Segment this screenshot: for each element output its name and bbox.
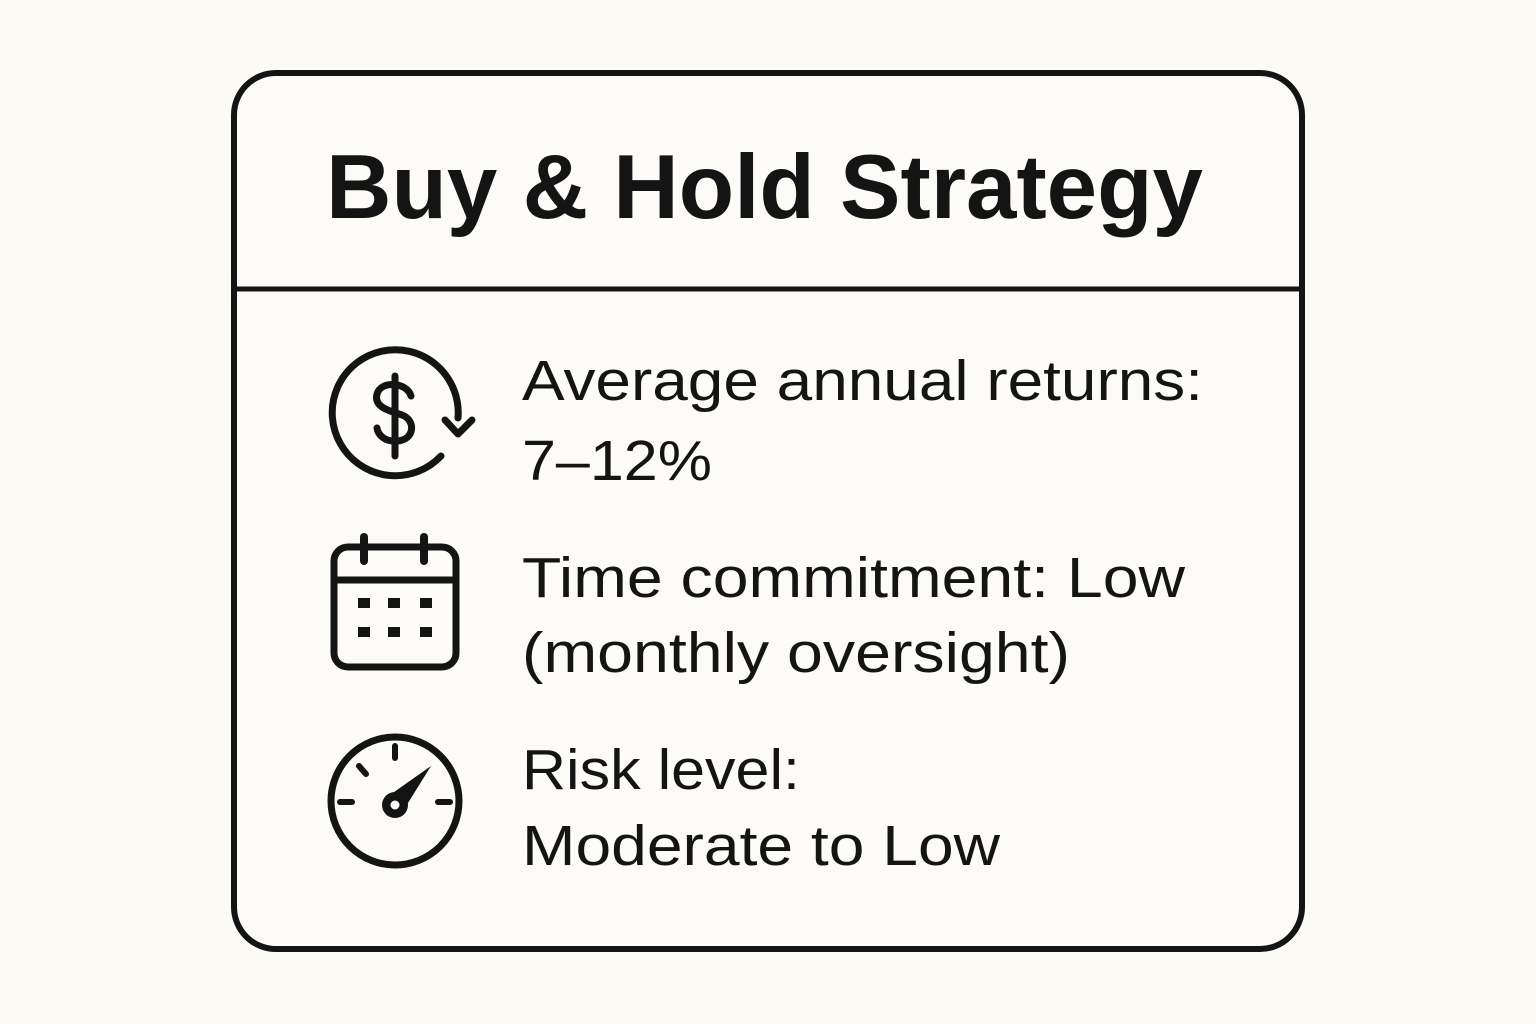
icon: calendar	[334, 537, 456, 667]
icon: dollar cycle	[332, 350, 472, 476]
text: time commitment	[522, 546, 1186, 685]
icon: gauge	[331, 737, 459, 865]
text: risk level	[522, 738, 1001, 878]
text: returns: 7–12%	[522, 429, 712, 493]
text: returns: Average annual returns:	[522, 349, 1203, 413]
text: time commitment: (monthly oversight)	[522, 621, 1070, 685]
text: risk level: Risk level:	[522, 738, 800, 802]
text: returns	[522, 349, 1203, 493]
text: risk level: Moderate to Low	[522, 814, 1001, 878]
title: Buy & Hold Strategy	[326, 137, 1203, 238]
card	[234, 73, 1302, 949]
text: time commitment: Time commitment: Low	[522, 546, 1186, 610]
